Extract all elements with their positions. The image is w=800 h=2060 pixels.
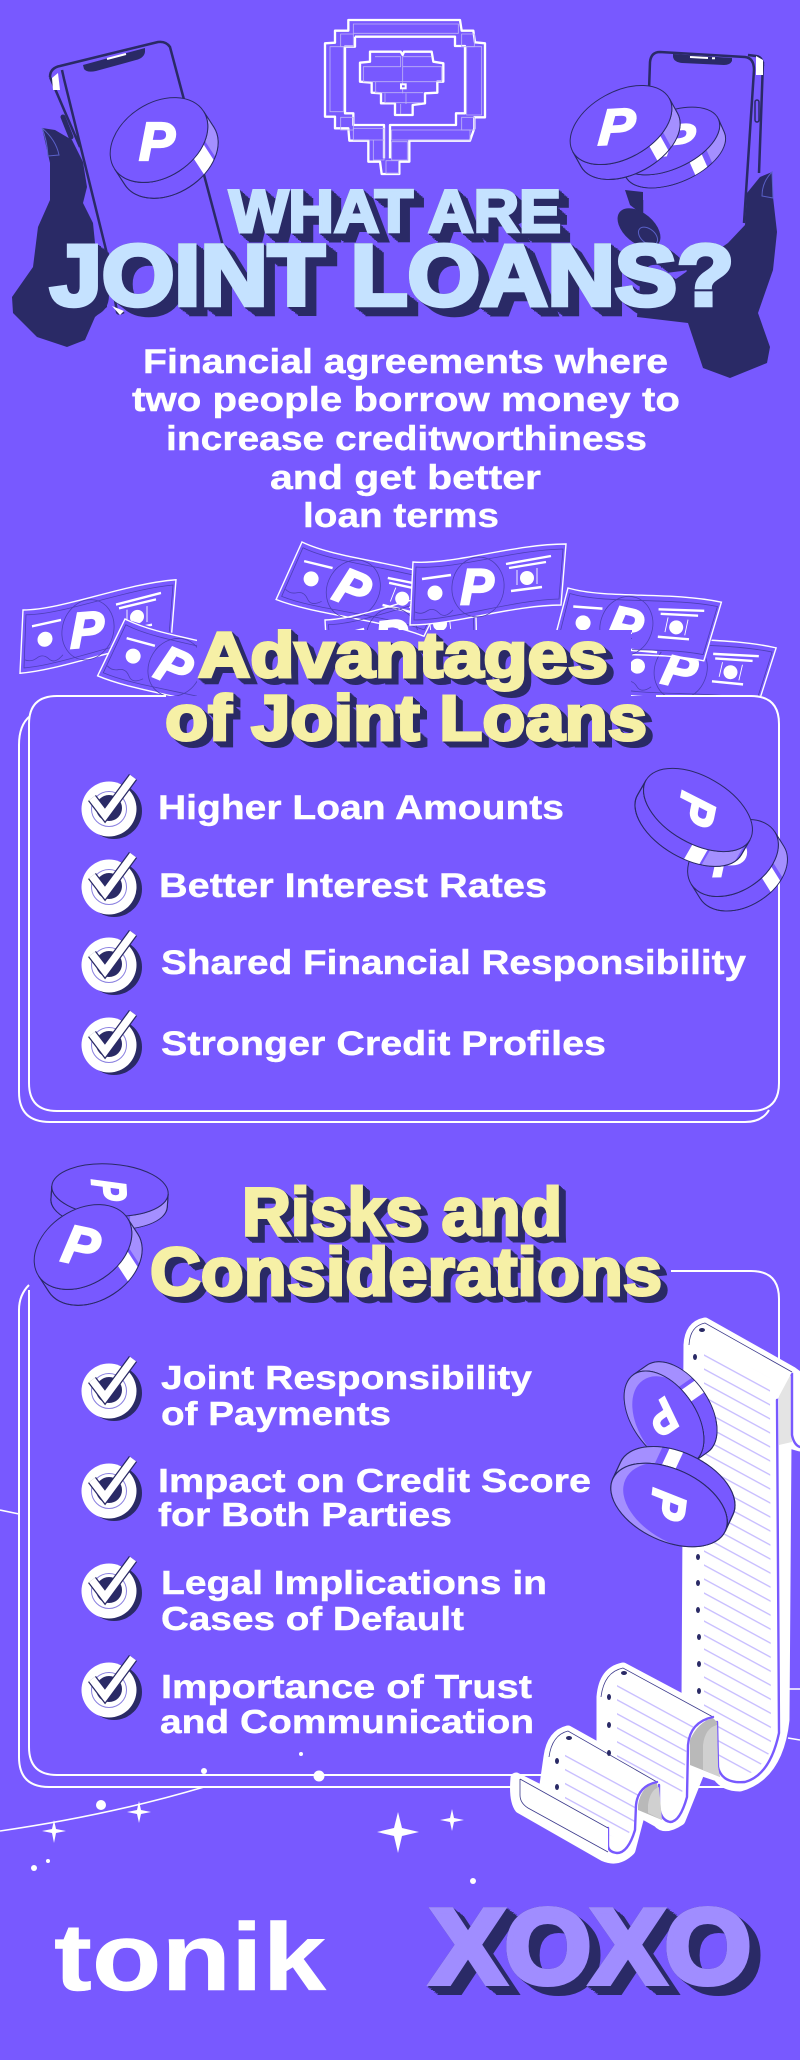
title: WHAT ARE bbox=[229, 178, 561, 245]
icon: right coin back: P bbox=[656, 114, 698, 166]
icon: left coin: P bbox=[139, 112, 176, 172]
icon: check 4 bbox=[82, 1658, 142, 1720]
icon: advantages coin upper bbox=[634, 768, 753, 867]
logo: tonik: tonik bbox=[54, 1904, 327, 2011]
list text: risks: Impact on Credit Score bbox=[158, 1462, 591, 1499]
list text: risks: Legal Implications in bbox=[161, 1564, 547, 1601]
receipt silhouette bbox=[516, 1323, 800, 1858]
icon: risks coin back: P bbox=[81, 1179, 137, 1201]
list: advantages bbox=[82, 777, 746, 1075]
bottom lip bbox=[520, 1779, 608, 1852]
heading: risks bbox=[150, 1174, 662, 1310]
intro text: two people borrow money to bbox=[132, 381, 680, 419]
icon: left hand bbox=[12, 128, 107, 347]
icon: right phone bbox=[642, 52, 763, 223]
icon: left phone bbox=[50, 42, 224, 315]
icon: right hand bbox=[610, 172, 777, 378]
icon: check 2 bbox=[82, 855, 142, 917]
icon: left coin bbox=[110, 97, 219, 199]
icon: risks coin back bbox=[50, 1163, 169, 1228]
list: risks bbox=[82, 1359, 591, 1740]
intro text: loan terms bbox=[303, 497, 499, 535]
icon: advantages coin upper: P bbox=[667, 787, 727, 833]
icon: risks coin front bbox=[34, 1204, 143, 1306]
icon: right coin front: P bbox=[597, 98, 638, 156]
icon: receipt coin upper bbox=[624, 1361, 718, 1459]
icon: check 3 bbox=[82, 933, 142, 995]
icon: advantages coin lower: P bbox=[712, 832, 747, 887]
heading: risks: Considerations bbox=[150, 1234, 662, 1310]
right curl bbox=[779, 1373, 792, 1445]
intro text: Financial agreements where bbox=[143, 343, 668, 381]
logo: XOXO: XOXO bbox=[431, 1888, 751, 2006]
decorative curves and sparkles bbox=[0, 1510, 800, 1884]
list text: advantages: Higher Loan Amounts bbox=[158, 789, 564, 827]
icon: check 1 bbox=[82, 777, 142, 839]
heading: advantages: Advantages bbox=[198, 619, 608, 691]
icon: receipt coin upper: P bbox=[637, 1388, 688, 1445]
upper strip bbox=[687, 1323, 792, 1782]
title: JOINT LOANS? bbox=[50, 228, 734, 324]
list text: risks bbox=[158, 1359, 591, 1740]
icon: risks coin front: P bbox=[57, 1213, 106, 1280]
list text: risks: Cases of Default bbox=[161, 1600, 464, 1637]
title bbox=[50, 178, 734, 324]
list text: advantages: Stronger Credit Profiles bbox=[161, 1025, 606, 1063]
icon: check 2 bbox=[82, 1459, 142, 1521]
icon: check 4 bbox=[82, 1013, 142, 1075]
intro text: and get better bbox=[270, 459, 541, 497]
panel: advantages frame bbox=[19, 696, 779, 1122]
list text: advantages: Shared Financial Responsibility bbox=[161, 944, 746, 982]
icon: right coin back bbox=[626, 106, 726, 188]
list text: advantages bbox=[158, 789, 746, 1063]
lower arch shadow bbox=[638, 1782, 662, 1820]
illustration: paper receipt bbox=[516, 1323, 800, 1858]
list text: advantages: Better Interest Rates bbox=[159, 867, 547, 905]
icon: check 1 bbox=[82, 1359, 142, 1421]
panel: risks frame bbox=[19, 1271, 779, 1787]
icon: pixel speech bubble with heart bbox=[325, 20, 485, 174]
icon: receipt coin lower: P bbox=[640, 1485, 697, 1525]
heading: advantages bbox=[165, 619, 647, 754]
list text: risks: for Both Parties bbox=[158, 1496, 452, 1533]
icon: check 3 bbox=[82, 1559, 142, 1621]
list text: risks: and Communication bbox=[160, 1703, 534, 1740]
lower strip bbox=[546, 1731, 657, 1853]
intro text bbox=[132, 343, 680, 535]
icon: right coin front bbox=[570, 85, 681, 180]
icon: advantages coin lower bbox=[687, 819, 788, 912]
list text: risks: Importance of Trust bbox=[161, 1668, 532, 1705]
icon: receipt coin lower bbox=[610, 1446, 736, 1548]
illustration: floating peso bills bbox=[20, 524, 776, 737]
intro text: increase creditworthiness bbox=[166, 420, 647, 458]
middle strip bbox=[601, 1668, 713, 1822]
heading: advantages: of Joint Loans bbox=[165, 682, 647, 754]
heading: risks: Risks and bbox=[242, 1174, 562, 1250]
upper arch shadow bbox=[690, 1718, 720, 1777]
perforation holes bbox=[555, 1328, 705, 1790]
list text: risks: Joint Responsibility bbox=[161, 1359, 533, 1396]
list text: risks: of Payments bbox=[161, 1395, 391, 1432]
